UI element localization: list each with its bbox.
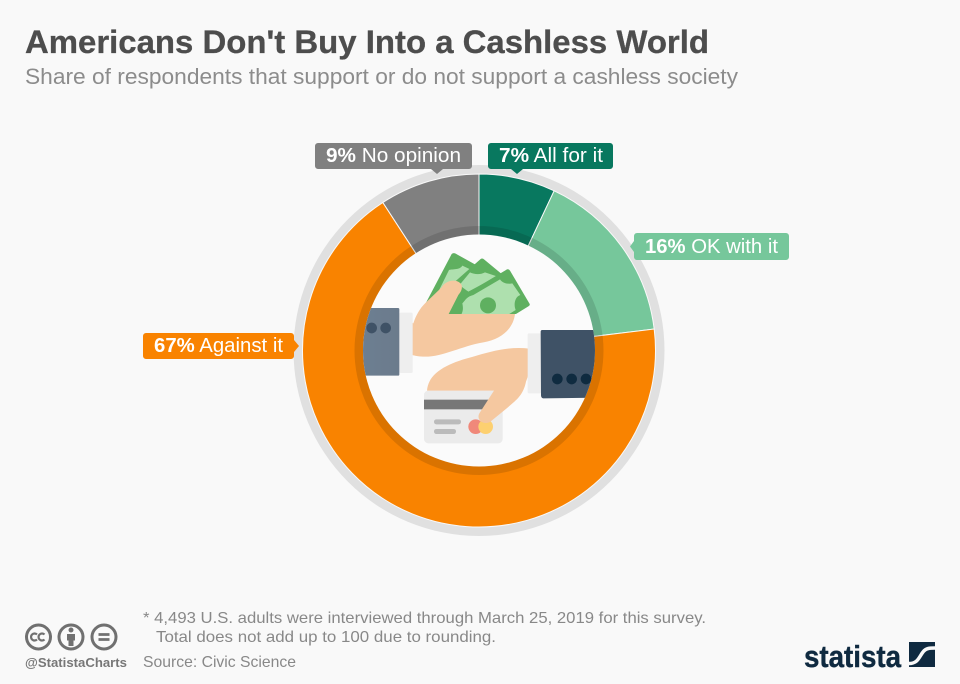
icon: attribution: [59, 625, 83, 649]
statista logo: statista: [804, 639, 902, 674]
icon: left cuff: [399, 313, 413, 373]
label: 9% no opinion: 9% No opinion: [326, 145, 461, 167]
segment: all for it: [479, 174, 554, 350]
title: Americans Don't Buy Into a Cashless World: [25, 24, 709, 60]
icon: upper hand: [412, 281, 515, 357]
icon: statista mark: [909, 642, 935, 667]
donut chart: [294, 165, 664, 536]
label: 16% ok with it: [630, 233, 789, 260]
icon: credit card: [424, 391, 503, 443]
label: 7% all for it: 7% All for it: [499, 145, 603, 167]
subtitle: Share of respondents that support or do not support a cashless society: [25, 64, 739, 89]
source: Source: Civic Science: [143, 654, 296, 671]
handle: @StatistaCharts: [25, 656, 127, 670]
label: 9% no opinion: [315, 143, 472, 174]
icon: cc: [26, 625, 50, 649]
label: 16% ok with it: 16% OK with it: [645, 236, 778, 258]
icon: creative commons licence: [26, 625, 116, 649]
segment: ok with it: [479, 191, 654, 350]
footnote: [143, 610, 706, 646]
icon: banknotes: [426, 253, 530, 317]
icon: left sleeve: [363, 308, 400, 376]
footnote: * 4,493 U.S. adults were interviewed through March 25, 2019 for this survey.: [143, 610, 706, 627]
icon: right sleeve: [540, 330, 595, 398]
illustration: cash and card exchange: [357, 253, 603, 443]
segment: against it: [302, 202, 655, 527]
label: 67% against it: 67% Against it: [154, 335, 283, 357]
footnote: Total does not add up to 100 due to rounding.: [156, 629, 496, 646]
icon: lower hand and card: [424, 348, 529, 443]
icon: right cuff: [528, 333, 542, 393]
label: 67% against it: [143, 333, 299, 359]
icon: no derivatives: [92, 625, 116, 649]
label: 7% all for it: [488, 143, 613, 174]
segment: no opinion: [383, 174, 479, 350]
